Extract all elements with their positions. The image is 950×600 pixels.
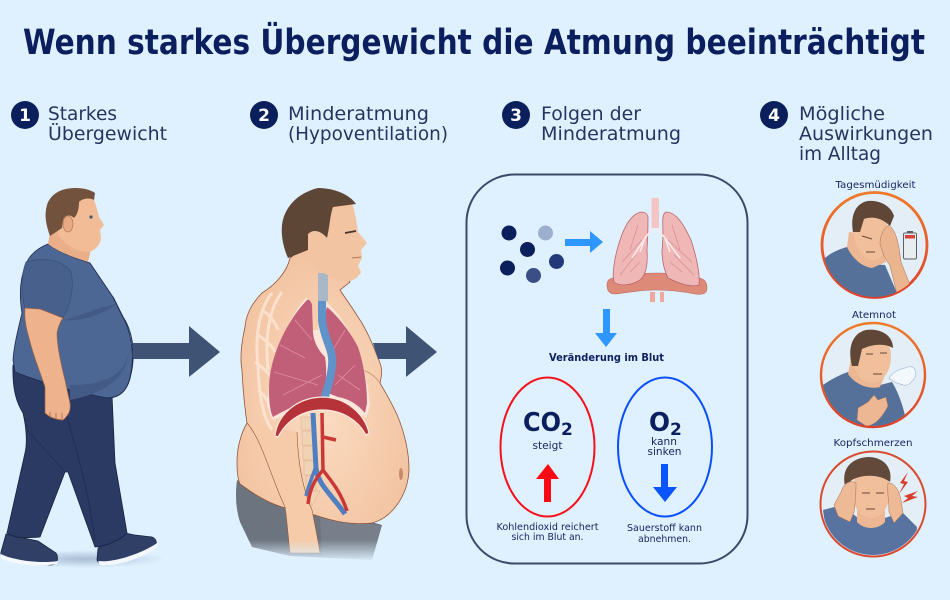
figure: torso with lungs [230, 188, 409, 562]
caption: oxygen: Sauerstoff kann [627, 523, 702, 534]
step 3 heading: 3 [510, 106, 522, 126]
panel: consequences of hypoventilation [466, 174, 748, 564]
step 3 heading: Minderatmung [541, 123, 681, 145]
O2 oval: 2 [670, 420, 682, 440]
O2 oval: sinken [648, 445, 682, 458]
heading: change in blood: Veränderung im Blut [549, 351, 664, 364]
bottom fade [230, 540, 390, 562]
neck [48, 225, 92, 262]
CO2 oval: 2 [561, 420, 573, 440]
vessels [313, 413, 345, 514]
lung outline glow [267, 297, 370, 420]
face [300, 200, 367, 281]
arrow: step 1 to 2 [133, 326, 220, 377]
ear [308, 232, 320, 252]
arrow: step 2 to 3 [373, 326, 437, 377]
diaphragm [275, 397, 369, 437]
O2 oval: O [649, 408, 670, 438]
torso and neck [237, 235, 409, 524]
figure: walking overweight man [1, 188, 165, 568]
spine [301, 417, 320, 506]
rear shoe [1, 534, 58, 565]
arrow: into lungs [565, 231, 603, 253]
step 1 heading: 1 [19, 106, 31, 126]
hair [46, 188, 95, 236]
ribcage outline [255, 292, 282, 430]
step 1 heading [11, 101, 167, 145]
step 2 heading: Minderatmung [288, 103, 429, 125]
chest fold [352, 370, 380, 383]
step 1 heading: Übergewicht [48, 122, 167, 145]
icon: tired man [820, 192, 927, 305]
caption: carbon dioxide [496, 522, 599, 543]
icon: lightning bolts [899, 472, 918, 503]
caption: oxygen [627, 523, 702, 545]
step 4 heading: 4 [768, 106, 780, 126]
right lung [325, 307, 367, 413]
arrow: down to blood [595, 309, 617, 347]
label: daytime sleepiness: Tagesmüdigkeit [834, 180, 916, 191]
pants [7, 365, 127, 547]
left lung [269, 300, 326, 417]
step 3 heading: Folgen der [541, 103, 641, 125]
O2 oval [618, 378, 712, 516]
step 2 heading [250, 101, 448, 145]
ear [63, 216, 73, 232]
caption: oxygen: abnehmen. [638, 534, 691, 545]
arrow: down [653, 464, 677, 502]
trachea [322, 300, 332, 397]
icon: breath cloud [889, 367, 916, 385]
gas particles [500, 226, 564, 283]
icon: man with headache [820, 452, 926, 560]
step 1 heading: Starkes [48, 103, 117, 125]
front shoe [97, 533, 156, 563]
icon: low battery [904, 233, 916, 259]
caption: carbon dioxide: Kohlendioxid reichert [496, 522, 599, 533]
hair [282, 188, 356, 258]
shirt [13, 244, 132, 398]
arm [247, 423, 320, 553]
CO2 oval: CO [523, 408, 561, 438]
label: headaches: Kopfschmerzen [834, 438, 912, 449]
CO2 oval [500, 378, 594, 516]
step 2 heading: 2 [258, 106, 270, 126]
step 4 heading: Mögliche [799, 103, 885, 125]
caption: carbon dioxide: sich im Blut an. [512, 532, 584, 543]
step 4 heading [760, 101, 933, 165]
O2 oval: kann [651, 435, 677, 448]
face [58, 194, 104, 252]
step 4 heading: im Alltag [799, 143, 881, 165]
arrow: up [536, 464, 559, 502]
CO2 oval: steigt [532, 439, 563, 452]
navel [399, 468, 403, 480]
step 2 heading: (Hypoventilation) [288, 123, 448, 145]
icon: breathless man [821, 323, 925, 430]
pants [236, 480, 382, 560]
arm [25, 308, 70, 420]
icon: lungs with diaphragm [607, 198, 707, 302]
step 4 heading: Auswirkungen [799, 123, 933, 145]
label: shortness of breath: Atemnot [852, 310, 896, 321]
step 3 heading [502, 101, 681, 145]
belly outline [107, 297, 133, 398]
